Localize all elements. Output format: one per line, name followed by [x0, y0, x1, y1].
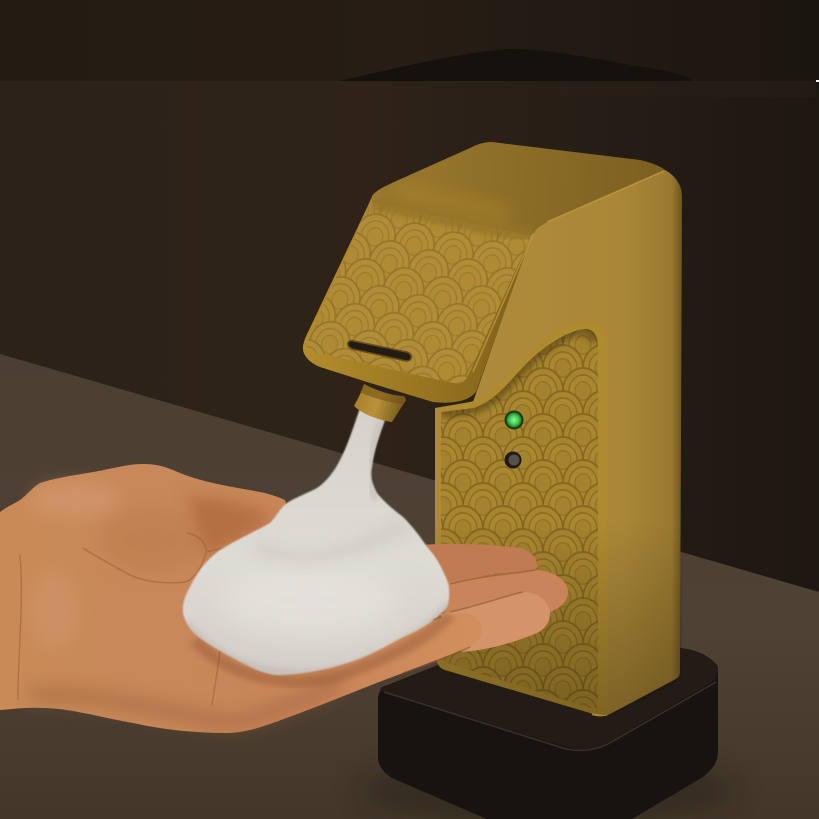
finger: middle	[440, 570, 568, 620]
finger gap shadows	[403, 570, 535, 673]
dispenser head	[303, 142, 665, 403]
foam highlight	[238, 583, 382, 634]
wall lighter strip	[560, 81, 816, 97]
dispenser base	[378, 648, 718, 819]
palm, thumb and index finger	[0, 464, 482, 733]
lower front panel frame	[435, 321, 607, 716]
nozzle collar shadow	[360, 384, 404, 404]
wrist highlight	[29, 570, 81, 650]
background: top band	[0, 0, 819, 81]
head front rim	[303, 197, 533, 403]
thumb shading	[187, 495, 272, 556]
thenar shading	[100, 508, 200, 572]
head front face pattern	[307, 197, 533, 383]
finger: ring	[420, 544, 537, 584]
body column and shoulder	[473, 170, 682, 716]
dispenser body	[435, 170, 682, 716]
finger: third	[440, 592, 550, 652]
base side	[378, 648, 718, 819]
grey button	[504, 452, 522, 468]
foam	[183, 408, 450, 676]
right edge sliver	[816, 80, 819, 82]
green LED indicator	[504, 410, 524, 430]
hand	[0, 464, 568, 733]
head top face	[372, 142, 665, 236]
foam stream shading	[371, 420, 382, 500]
dark shape in top band	[338, 49, 692, 81]
panel shadow under arch	[441, 329, 598, 412]
base bevel highlight	[384, 682, 716, 750]
base foot	[390, 770, 703, 819]
sensor slot	[348, 341, 411, 361]
palm creases	[18, 533, 228, 705]
blend of top face into pattern	[372, 190, 532, 236]
lower front panel pattern	[441, 329, 598, 708]
base shadow on counter	[358, 760, 738, 819]
background: wall	[0, 81, 819, 611]
lower palm shading	[30, 684, 340, 722]
base top face	[380, 648, 718, 750]
nozzle	[354, 384, 406, 422]
counter surface	[0, 354, 819, 819]
light patch on top face	[400, 190, 510, 215]
body lower shading	[435, 520, 682, 716]
foam lower edge shading	[185, 605, 450, 676]
foam fold shading	[255, 525, 410, 558]
shoulder edge highlight	[473, 171, 664, 372]
heel of hand highlight	[30, 482, 120, 518]
foam contact shadow	[195, 615, 450, 682]
